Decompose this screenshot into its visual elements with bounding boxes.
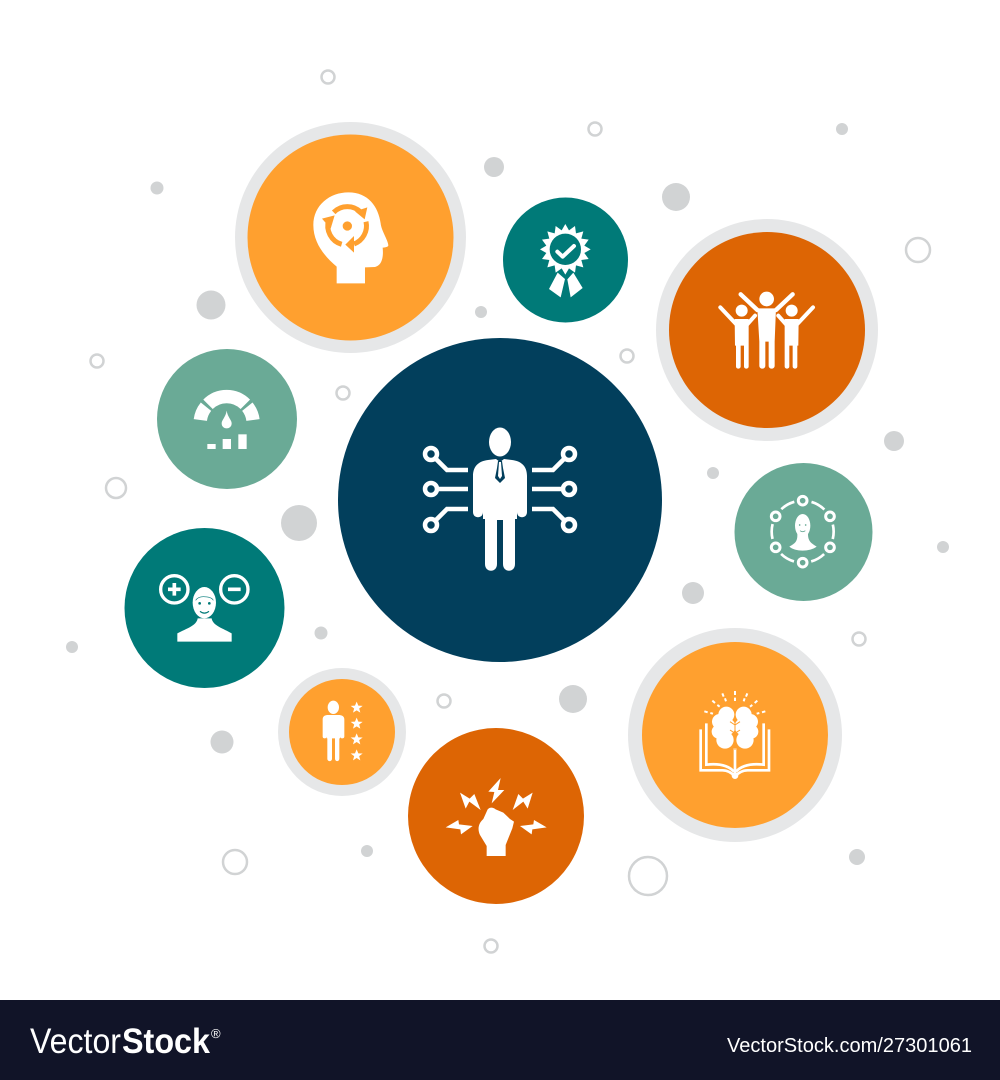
image id: VectorStock.com/27301061 bbox=[727, 1035, 972, 1057]
logo wordmark: Stock: Stock bbox=[122, 1022, 210, 1061]
icon: brain over open book bbox=[701, 691, 769, 779]
icon: award rosette with check bbox=[540, 224, 591, 297]
panel: head with cycle bubble bbox=[235, 122, 466, 353]
decorative ring dots bbox=[90, 70, 930, 952]
icon: fist with lightning bolts bbox=[446, 778, 547, 856]
icon: person in ring of nodes bbox=[771, 496, 834, 567]
panel: team celebration bubble bbox=[656, 219, 878, 441]
icon: three people with raised arms bbox=[720, 292, 813, 369]
footer bar bbox=[0, 1000, 1000, 1080]
registered mark: ® bbox=[211, 1026, 221, 1041]
icon: head with rotating arrows bbox=[313, 192, 388, 283]
panel: brain and book bubble bbox=[628, 628, 842, 842]
icon: person with four stars bbox=[323, 701, 363, 761]
panel: plus and minus person bubble bbox=[124, 528, 284, 688]
panel: gauge bubble bbox=[157, 349, 297, 489]
decorative filled dots bbox=[66, 123, 949, 865]
panel: quality badge bubble bbox=[503, 198, 628, 322]
icon: person between plus and minus bbox=[161, 576, 248, 642]
panel: network person bubble bbox=[734, 463, 872, 601]
icon: businessman with circuit connections bbox=[425, 428, 575, 571]
panel: star rating bubble bbox=[278, 668, 406, 796]
logo wordmark: Vector: Vector bbox=[30, 1022, 121, 1061]
panel: fist bubble bbox=[408, 728, 584, 904]
icon: gauge meter with bars bbox=[200, 397, 253, 449]
panel: centre bubble with businessman bbox=[338, 338, 662, 662]
